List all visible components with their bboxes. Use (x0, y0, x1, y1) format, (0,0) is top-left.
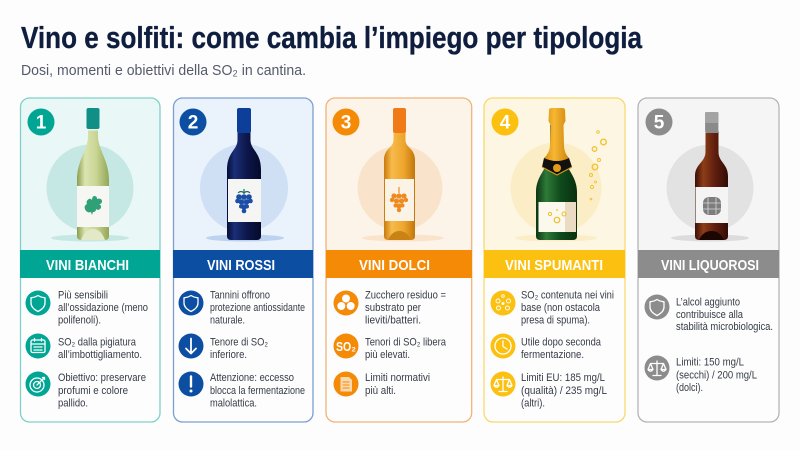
text: alcol: contribuisce alla (676, 309, 744, 321)
icon: scale (490, 372, 516, 396)
text: pigiatura: all’imbottigliamento. (58, 349, 142, 361)
text: contenuta: SO₂ contenuta nei vini (521, 290, 614, 302)
text: obiettivo (58, 372, 146, 410)
panel: vini dolci (326, 98, 472, 422)
header: vini spumanti (484, 250, 625, 278)
text: limiti EU: (altri). (521, 398, 545, 410)
number badge 2 (180, 108, 206, 136)
icon: SO2: SO₂ (336, 339, 356, 354)
icon: dots (490, 290, 516, 316)
text: pigiatura: SO₂ dalla pigiatura (58, 336, 137, 348)
header: vini spumanti: VINI SPUMANTI (505, 258, 603, 274)
icon: bubbles (590, 131, 606, 200)
icon: clock (490, 334, 516, 358)
bottle: sparkling wine (536, 108, 577, 240)
text: pigiatura (58, 336, 142, 361)
text: zucchero: Zucchero residuo = (365, 290, 446, 302)
text: sensibili: all’ossidazione (meno (58, 302, 148, 314)
text: obiettivo: profumi e colore (58, 385, 128, 397)
number badge 4: 4 (500, 112, 511, 134)
text: zucchero (365, 290, 446, 326)
text: tenore: Tenore di SO₂ (210, 336, 268, 348)
text: attenzione (210, 372, 305, 410)
text: limiti EU (521, 372, 607, 410)
text: zucchero: lieviti/batteri. (365, 314, 421, 326)
text: alcol: L’alcol aggiunto (676, 296, 740, 308)
text: limiti: più alti. (365, 385, 396, 397)
panel: vini bianchi (20, 98, 160, 422)
text: tenori: Tenori di SO₂ libera (365, 336, 447, 348)
text: utile: fermentazione. (521, 349, 584, 361)
text: limiti EU: (qualità) / 235 mg/L (521, 385, 607, 397)
text: sensibili (58, 290, 148, 326)
text: tenore (210, 336, 268, 361)
bottle: sweet wine (384, 108, 415, 240)
bottle: white wine (77, 108, 109, 240)
icon: SO2 (334, 334, 358, 358)
text: limiti: (dolci). (676, 382, 703, 394)
header: vini liquorosi (638, 250, 779, 278)
bottle: red wine (227, 108, 261, 240)
bottle: fortified wine (695, 112, 728, 240)
text: contenuta: presa di spuma). (521, 314, 590, 326)
text: contenuta (521, 290, 614, 326)
number badge 3: 3 (341, 112, 351, 134)
panel: vini rossi (173, 98, 313, 422)
number badge 5: 5 (654, 112, 665, 134)
text: attenzione: malolattica. (210, 398, 257, 410)
text: limiti (365, 372, 430, 397)
icon: calendar (26, 334, 50, 358)
icon: shield (178, 290, 204, 316)
text: obiettivo: Obiettivo: preservare (58, 372, 146, 384)
text: sensibili: polifenoli). (58, 314, 101, 326)
text: utile (521, 336, 602, 361)
text: utile: Utile dopo seconda (521, 336, 602, 348)
panel: vini liquorosi (638, 98, 779, 422)
text: tannini: Tannini offrono (210, 290, 270, 302)
header: vini dolci (326, 250, 472, 278)
text: attenzione: Attenzione: eccesso (210, 372, 294, 384)
icon: molecules (334, 290, 358, 316)
text: alcol: stabilità microbiologica. (676, 321, 773, 333)
text: obiettivo: pallido. (58, 398, 88, 410)
header: vini liquorosi: VINI LIQUOROSI (661, 258, 759, 274)
text: limiti EU: Limiti EU: 185 mg/L (521, 372, 605, 384)
icon: target (26, 372, 50, 396)
number badge 4 (492, 108, 518, 136)
text: tenori (365, 336, 447, 361)
icon: document (334, 372, 358, 396)
text: sensibili: Più sensibili (58, 290, 108, 302)
icon: down arrow (178, 334, 204, 358)
text: zucchero: substrato per (365, 302, 421, 314)
text: limiti: (secchi) / 200 mg/L (676, 370, 757, 382)
subtitle: Dosi, momenti e obiettivi della SO₂ in cantina. (21, 62, 306, 79)
icon: scale (644, 356, 670, 380)
number badge 2: 2 (188, 112, 198, 134)
number badge 3 (332, 108, 360, 136)
number badge 1 (28, 108, 54, 136)
text: attenzione: blocca la fermentazione (210, 385, 305, 397)
header: vini dolci: VINI DOLCI (359, 258, 430, 274)
text: contenuta: base (non ostacola (521, 302, 601, 314)
text: tannini (210, 290, 305, 326)
text: tenore: inferiore. (210, 349, 247, 361)
text: tannini: protezione antiossidante (210, 302, 305, 314)
number badge 1: 1 (36, 112, 47, 134)
text: limiti (676, 356, 757, 394)
number badge 5 (646, 108, 672, 136)
text: limiti: Limiti: 150 mg/L (676, 356, 744, 368)
icon: shield (644, 294, 670, 320)
header: vini rossi: VINI ROSSI (207, 258, 275, 274)
text: tannini: naturale. (210, 314, 245, 326)
header: vini bianchi: VINI BIANCHI (46, 258, 129, 274)
panel: vini spumanti (484, 98, 625, 422)
icon: shield (26, 290, 50, 316)
header: vini bianchi (20, 250, 160, 278)
text: limiti: Limiti normativi (365, 372, 430, 384)
icon: exclamation (178, 372, 204, 396)
text: tenori: più elevati. (365, 349, 410, 361)
text: alcol (676, 296, 773, 333)
title: Vino e solfiti: come cambia l’impiego per tipologia (21, 20, 643, 55)
header: vini rossi (173, 250, 313, 278)
